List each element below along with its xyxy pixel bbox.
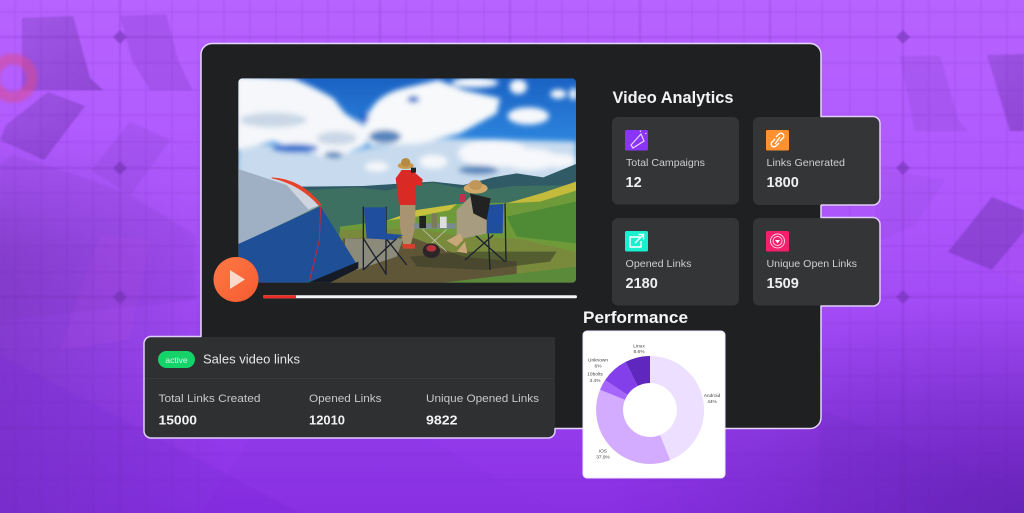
- chart labels: 44%: [707, 399, 718, 405]
- heading: Performance: Performance: [583, 308, 688, 327]
- donut chart: [596, 356, 704, 464]
- icon: pink ring: [0, 59, 32, 97]
- card: Unique Open Links: [753, 218, 880, 306]
- card: Total Campaigns: 12: [626, 175, 642, 191]
- card: Links Generated: [753, 116, 880, 205]
- chart labels: Unknown: [588, 358, 608, 364]
- folding chairs: [363, 203, 506, 275]
- panel: performance donut chart: [583, 331, 725, 478]
- panel: Sales video links: Unique Opened Links: [426, 393, 540, 405]
- panel: Sales video links: Opened Links: [309, 393, 382, 405]
- ground: [330, 228, 576, 283]
- panel: Sales video links: 12010: [309, 412, 345, 428]
- lower pale haze: [238, 138, 576, 190]
- person in red jacket: [396, 158, 423, 249]
- panel: Sales video links: Total Links Created: [158, 393, 260, 405]
- progress bar: [263, 295, 577, 298]
- icon: target: [766, 231, 789, 252]
- card: Opened Links: [612, 218, 739, 306]
- chart labels: 6%: [595, 364, 602, 370]
- status badge: active: [165, 355, 188, 365]
- chart labels: 3.4%: [590, 378, 601, 384]
- left cumulus: [235, 75, 367, 159]
- chart labels: iOS: [599, 448, 607, 454]
- camping tent: [238, 169, 358, 283]
- card: Total Campaigns: [612, 117, 739, 204]
- card: Opened Links: 2180: [626, 276, 658, 292]
- icon: megaphone: [625, 130, 648, 150]
- card: Opened Links: Opened Links: [626, 258, 692, 270]
- play button: [214, 257, 258, 302]
- video photo: campers on a hillside: [235, 75, 577, 283]
- card: Total Campaigns: Total Campaigns: [626, 157, 705, 169]
- icon: chain link: [766, 130, 789, 150]
- green slope: [340, 182, 576, 283]
- chart labels: Linux: [633, 344, 645, 350]
- heading: Video Analytics: Video Analytics: [612, 89, 734, 107]
- panel: Sales video links: [144, 336, 555, 438]
- seated person: [447, 180, 491, 253]
- chart labels: [587, 344, 721, 460]
- panel: Sales video links: Sales video links: [203, 352, 300, 366]
- icon: external link: [625, 231, 648, 252]
- chart labels: Android: [704, 393, 721, 399]
- chart labels: 37.9%: [596, 454, 611, 460]
- panel: Sales video links: 15000: [158, 412, 197, 428]
- camp table: [414, 213, 456, 258]
- chart labels: 8.6%: [634, 349, 645, 355]
- center cumulus: [363, 80, 500, 146]
- far mountains: [297, 164, 576, 191]
- panel: Sales video links: 9822: [426, 412, 458, 428]
- chart labels: 10bolts: [587, 372, 603, 378]
- status badge: [158, 351, 195, 368]
- main dark panel: [201, 44, 821, 428]
- card: Links Generated: Links Generated: [766, 157, 845, 169]
- card: Unique Open Links: 1509: [766, 276, 799, 292]
- card: Unique Open Links: Unique Open Links: [766, 258, 857, 270]
- card: Links Generated: 1800: [766, 175, 799, 191]
